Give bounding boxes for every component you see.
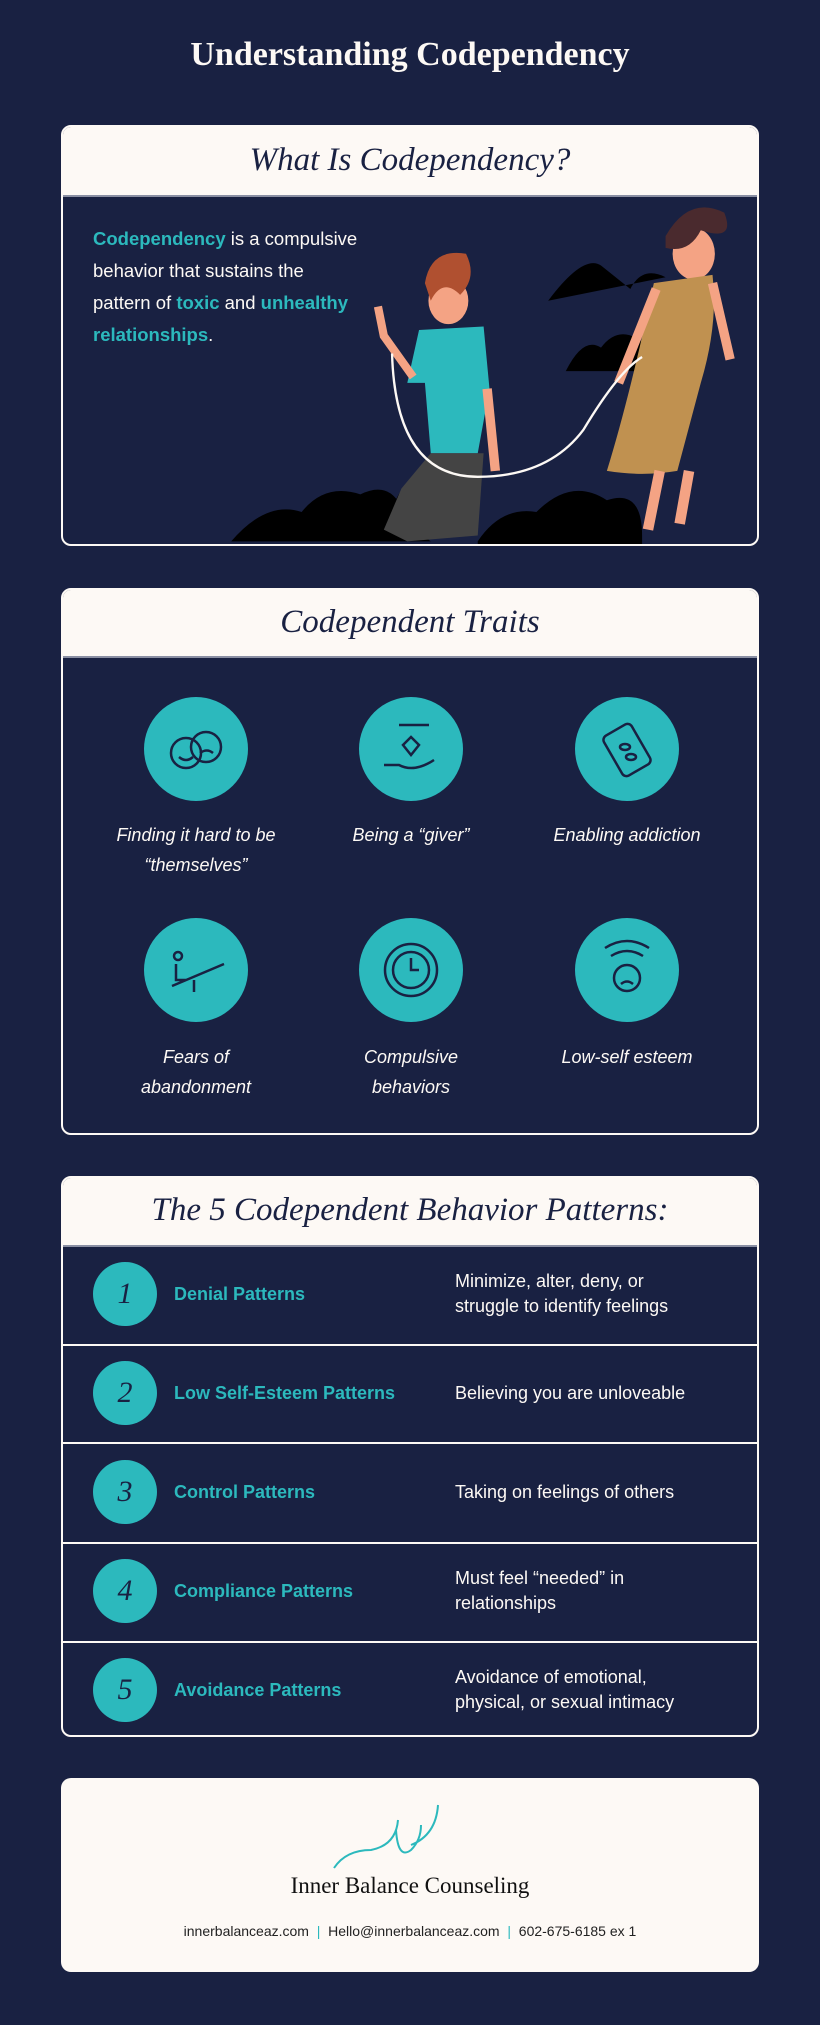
row 1: 1 bbox=[118, 1277, 132, 1310]
label: low self esteem: Low-self esteem bbox=[561, 1047, 693, 1067]
row 5 bbox=[63, 1641, 757, 1737]
illustration: couple bbox=[231, 207, 735, 544]
row 5: Avoidance of emotional, bbox=[455, 1667, 647, 1687]
row 3: Control Patterns bbox=[174, 1482, 315, 1502]
icon: masks bbox=[144, 697, 248, 801]
woman bbox=[673, 228, 715, 280]
label: finding it hard: Finding it hard to be “themselves” bbox=[116, 825, 276, 875]
label: compulsive behaviors: Compulsive behaviors bbox=[364, 1047, 458, 1097]
row 2 bbox=[63, 1344, 757, 1443]
row 1 bbox=[93, 1262, 668, 1326]
row 2: 2 bbox=[118, 1376, 132, 1409]
row 1: struggle to identify feelings bbox=[455, 1296, 668, 1316]
heading: what is codependency: What Is Codependency? bbox=[250, 142, 570, 178]
row 3 bbox=[63, 1442, 757, 1542]
heading: 5 patterns: The 5 Codependent Behavior Patterns: bbox=[152, 1192, 668, 1228]
icon: pills bbox=[575, 697, 679, 801]
heading: what is codependency bbox=[63, 127, 757, 197]
icon: clock bbox=[359, 918, 463, 1022]
panel: what is codependency bbox=[61, 125, 759, 546]
row 3: Taking on feelings of others bbox=[455, 1482, 674, 1502]
row 4: 4 bbox=[118, 1574, 132, 1607]
icon: sad face bbox=[575, 918, 679, 1022]
row 2: Believing you are unloveable bbox=[455, 1383, 685, 1403]
logo: ibc bbox=[333, 1804, 439, 1868]
heading: traits: Codependent Traits bbox=[280, 604, 540, 640]
row 5: Avoidance Patterns bbox=[174, 1680, 341, 1700]
row 4: Compliance Patterns bbox=[174, 1581, 353, 1601]
row 1: Denial Patterns bbox=[174, 1284, 305, 1304]
panel: codependent traits bbox=[61, 588, 759, 1135]
contact info: innerbalanceaz.com | Hello@innerbalanceaz.com | 602-675-6185 ex 1 bbox=[184, 1923, 636, 1939]
row 1: Minimize, alter, deny, or bbox=[455, 1271, 644, 1291]
man bbox=[428, 277, 468, 324]
footer panel bbox=[61, 1778, 759, 1972]
icon: seesaw bbox=[144, 918, 248, 1022]
label: fears of abandonment: Fears of abandonment bbox=[141, 1047, 251, 1097]
row 2: Low Self-Esteem Patterns bbox=[174, 1383, 395, 1403]
text block: definition: Codependency is a compulsive behavior that sustains the pattern of toxic and unhealthy relationships. bbox=[93, 228, 357, 345]
row 4: Must feel “needed” in bbox=[455, 1568, 624, 1588]
row 4: relationships bbox=[455, 1593, 556, 1613]
row 3: 3 bbox=[118, 1475, 132, 1508]
heading: 5 patterns bbox=[63, 1178, 757, 1247]
company name: Inner Balance Counseling bbox=[291, 1873, 529, 1898]
label: enabling addiction: Enabling addiction bbox=[553, 825, 701, 845]
label: giver: Being a “giver” bbox=[352, 825, 470, 845]
heading: traits bbox=[63, 590, 757, 658]
title: Understanding Codependency bbox=[190, 36, 630, 73]
panel: behavior patterns bbox=[61, 1176, 759, 1737]
row 5: physical, or sexual intimacy bbox=[455, 1692, 674, 1712]
row 4 bbox=[63, 1542, 757, 1641]
icon: giver bbox=[359, 697, 463, 801]
row 5: 5 bbox=[118, 1673, 132, 1706]
